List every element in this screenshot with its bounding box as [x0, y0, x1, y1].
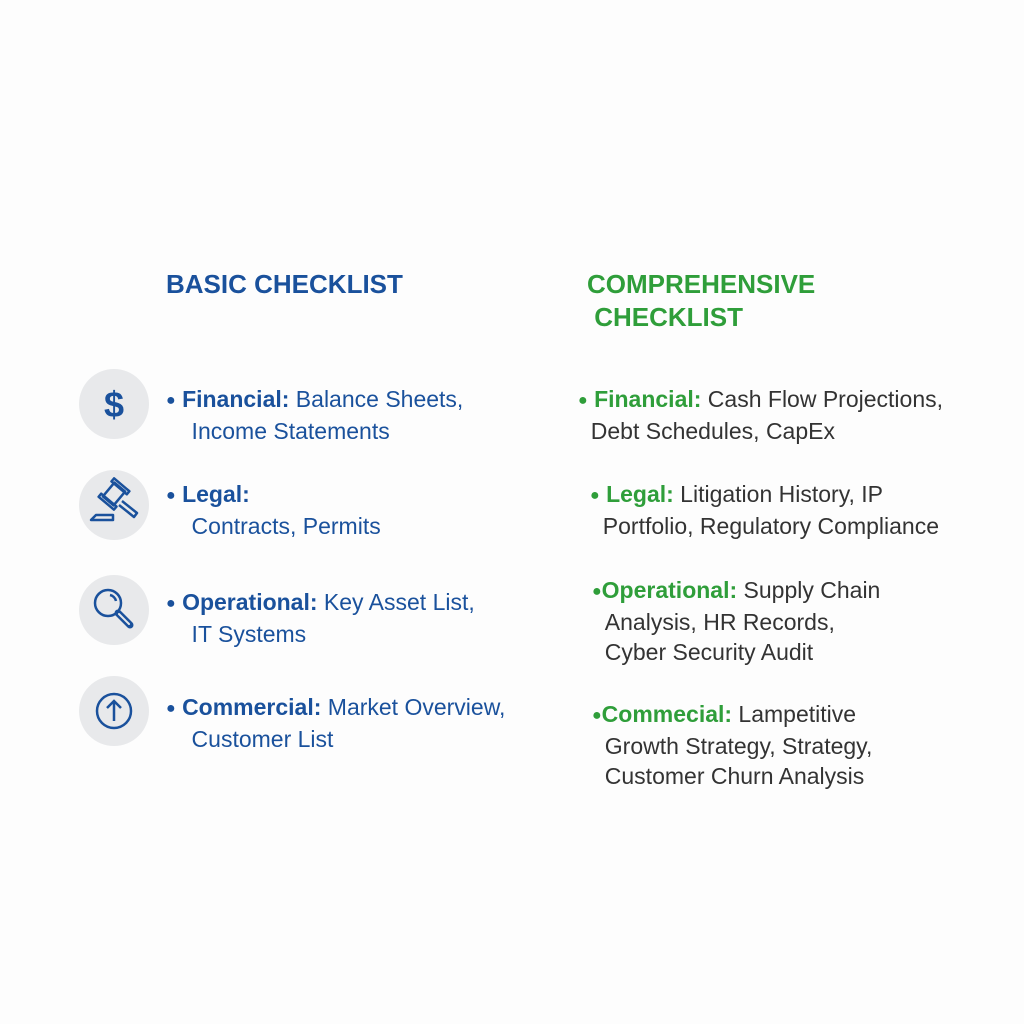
basic: legal: ● Legal:: [166, 481, 250, 507]
basic: commercial: ● Commercial: Market Overview,: [166, 694, 505, 720]
comprehensive: commercial: [592, 701, 872, 789]
basic: legal: [166, 481, 381, 539]
icon: up arrow: [79, 676, 149, 746]
comprehensive: legal: Portfolio, Regulatory Compliance: [603, 513, 939, 539]
basic: operational: IT Systems: [192, 621, 306, 647]
heading: comprehensive checklist: CHECKLIST: [594, 302, 743, 332]
heading: comprehensive checklist: [587, 269, 815, 332]
comprehensive: operational: Analysis, HR Records,: [605, 609, 835, 635]
icon: dollar: $: [104, 384, 124, 425]
basic: operational: ● Operational: Key Asset List,: [166, 589, 475, 615]
heading: comprehensive checklist: COMPREHENSIVE: [587, 269, 815, 299]
icon: dollar: [79, 369, 149, 439]
basic: financial: [166, 386, 463, 444]
comprehensive: financial: [578, 386, 943, 444]
basic: operational: [166, 589, 475, 647]
comprehensive: financial: ● Financial: Cash Flow Projections,: [578, 386, 943, 412]
comprehensive: financial: Debt Schedules, CapEx: [591, 418, 835, 444]
basic: financial: ● Financial: Balance Sheets,: [166, 386, 463, 412]
basic: financial: Income Statements: [192, 418, 390, 444]
basic: commercial: [166, 694, 505, 752]
comprehensive: legal: [590, 481, 939, 539]
comprehensive: operational: ●Operational: Supply Chain: [592, 577, 880, 603]
basic: commercial: Customer List: [192, 726, 333, 752]
comprehensive: commercial: Growth Strategy, Strategy,: [605, 733, 872, 759]
icon: magnifier: [79, 575, 149, 645]
comprehensive: operational: [592, 577, 880, 665]
comprehensive: operational: Cyber Security Audit: [605, 639, 813, 665]
comprehensive: legal: ● Legal: Litigation History, IP: [590, 481, 883, 507]
basic: legal: Contracts, Permits: [192, 513, 381, 539]
heading: basic checklist: BASIC CHECKLIST: [166, 269, 403, 299]
comprehensive: commercial: ●Commecial: Lampetitive: [592, 701, 856, 727]
comprehensive: commercial: Customer Churn Analysis: [605, 763, 864, 789]
icon: gavel: [79, 470, 149, 540]
